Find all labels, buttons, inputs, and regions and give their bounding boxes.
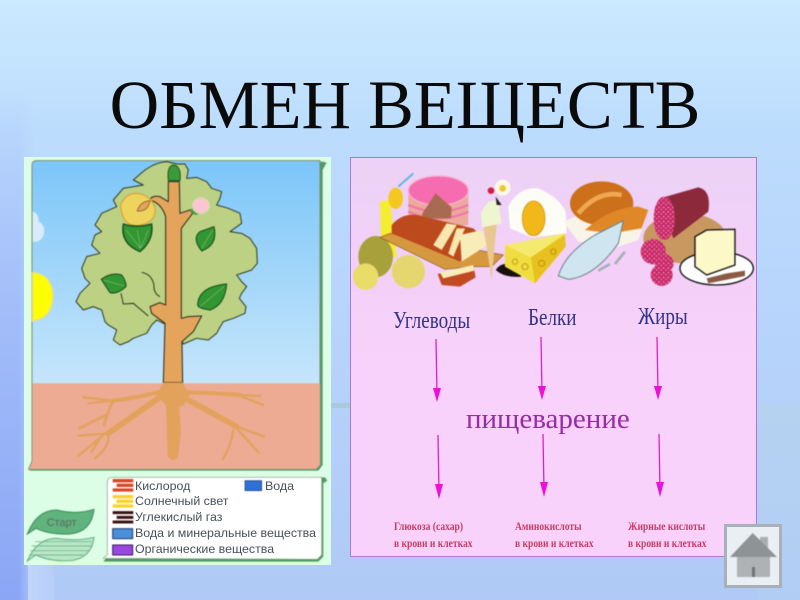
icon: butter on plate [679,229,753,284]
icon: flower [190,198,210,215]
heading: fats: Жиры [638,303,688,330]
icon: top bud [168,165,180,181]
icon: cheese [495,233,565,283]
title: ОБМЕН ВЕЩЕСТВ [110,67,700,143]
roots [78,383,264,461]
heading: carbohydrates: Углеводы [393,307,470,334]
heading: digestion: пищеварение [466,403,630,435]
icon: fruit [121,193,155,226]
background divider band [331,403,351,408]
button: start: Старт [47,517,77,529]
label: glucose: в крови и клетках [394,538,472,550]
legend swatch: oxygen [113,481,133,490]
leaf 1 [123,224,152,252]
legend labels: Кислород [135,479,190,493]
label: amino acids: Аминокислоты [515,521,582,533]
label: amino acids: в крови и клетках [515,538,593,550]
tree trunk [150,182,202,383]
arrow: carbohydrates upper [433,339,441,402]
tree canopy [76,162,257,345]
scene frame [29,161,327,471]
legend swatch: organic [113,545,133,555]
icon: cloud [33,212,44,242]
icon: sausage [640,187,726,285]
icon: home button [724,524,782,588]
legend swatch: sunlight [113,497,133,506]
arrows [433,337,664,499]
leaf 4 [198,284,227,310]
icon: cake [408,175,468,226]
legend labels: Солнечный свет [135,494,228,508]
background right lower block [757,404,800,600]
panel: plant metabolism [24,157,331,565]
legend labels: Углекислый газ [135,510,222,524]
label: amino acids [515,521,594,550]
legend swatch: water and minerals [113,529,133,539]
button: start [27,509,94,534]
legend labels: Органические вещества [135,542,274,556]
icon: roast chicken [563,181,648,246]
arrow: fats lower [656,434,664,497]
icon: fish [558,220,624,279]
label: fatty acids [628,521,706,550]
button: stop [27,537,94,561]
label: glucose: Глюкоза (сахар) [394,521,463,533]
legend box [103,477,327,562]
leaf 3 [101,274,126,293]
heading: proteins: Белки [528,304,577,331]
legend labels: Вода и минеральные вещества [135,526,316,540]
arrow: carbohydrates lower [435,435,443,499]
panel: nutrients [350,157,757,557]
icon: sun [33,273,53,321]
icon: ice cream [480,179,510,279]
label: fatty acids: Жирные кислоты [628,521,705,533]
icon: fried egg [508,188,566,237]
arrow: proteins upper [538,337,546,400]
arrow: proteins lower [540,434,548,497]
arrow: fats upper [654,337,662,400]
legend swatch: carbon dioxide [113,513,133,522]
icon: lemonade [379,173,413,258]
label: glucose [394,521,472,550]
icon: bread on board [379,214,503,286]
legend labels [135,479,316,556]
label: fatty acids: в крови и клетках [628,538,706,550]
icon: potatoes [352,235,424,289]
background left band [0,146,28,600]
background lower strip [28,565,54,600]
legend swatch: water [245,481,262,491]
legend labels: Вода [265,479,294,493]
leaf 2 [196,227,215,251]
